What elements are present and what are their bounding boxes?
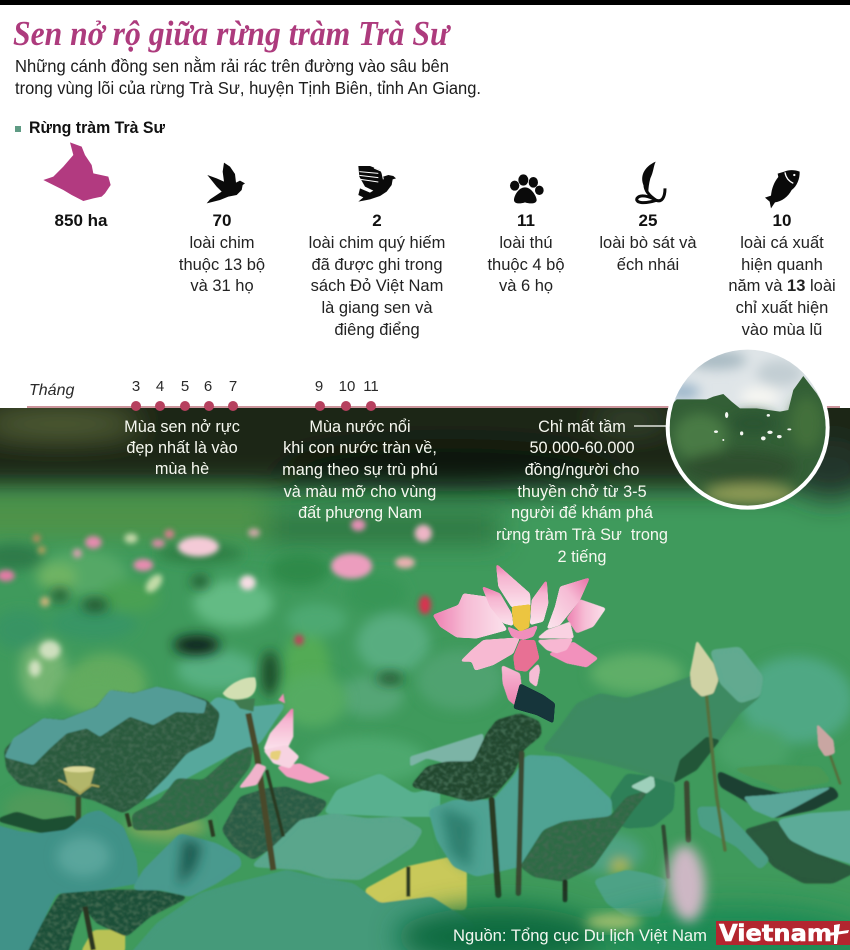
stat: rare birds 2: 2 [372, 211, 382, 230]
month labels: 4 [156, 378, 164, 395]
dark forest band [0, 340, 850, 500]
leaf: dark under bottom left [22, 890, 190, 950]
month labels: 11 [363, 378, 379, 395]
note: flood season [282, 418, 438, 522]
note: lotus season: Mùa sen nở rực [124, 418, 240, 436]
stat: rare birds 2: là giang sen và [322, 299, 433, 317]
month labels: 6 [204, 378, 212, 395]
leaf: large mottled, left [4, 687, 220, 813]
leaf: teal main, centre [250, 813, 423, 880]
blurred bud, foreground [666, 844, 708, 923]
note: lotus season [124, 418, 240, 478]
icon: fish [765, 170, 800, 208]
stat: birds 70: và 31 họ [190, 277, 254, 295]
icon: cobra [637, 162, 665, 203]
callout leader line [634, 425, 668, 427]
icon: paw print [510, 174, 544, 203]
seed pod: centre [223, 677, 256, 712]
timeline axis [27, 406, 840, 408]
blurred field of leaves [0, 497, 500, 717]
note: flood season: mang theo sự trù phú [282, 461, 438, 479]
stat: birds 70: loài chim [189, 234, 255, 252]
leaf: centre-right green [610, 773, 675, 828]
leaf: teal bottom left [0, 810, 138, 950]
stat: mammals 11: loài thú [499, 234, 553, 252]
icon: map of forest [43, 142, 111, 201]
dark gaps between leaves [52, 576, 403, 697]
dark leaf behind flower stem [513, 683, 555, 723]
note: flood season: và màu mỡ cho vùng [284, 483, 436, 501]
source: Nguồn: Tổng cục Du lịch Việt Nam [453, 927, 707, 945]
note: boat tour price: Chỉ mất tầm [538, 418, 626, 436]
title: Sen nở rộ giữa rừng tràm Trà Sư [13, 14, 452, 53]
distant pink lotuses and buds [0, 519, 432, 677]
note: boat tour price: 2 tiếng [558, 548, 606, 566]
leaf: right-hand dark fold [717, 770, 840, 818]
blurred foreground foliage [397, 905, 850, 950]
stat: mammals 11 [487, 174, 565, 295]
leaf: bottom big [125, 870, 473, 950]
month labels: 10 [339, 378, 355, 395]
stat: mammals 11: 11 [517, 211, 535, 230]
month labels [132, 378, 379, 395]
note: flood season: Mùa nước nổi [309, 418, 411, 436]
stat: reptiles and amphibians 25: loài bò sát và [599, 234, 697, 252]
stat: fish 10: loài cá xuất [740, 234, 824, 252]
intro text [15, 55, 481, 98]
leaf: large green, upper right [542, 647, 763, 783]
note: boat tour price: đồng/người cho [525, 461, 639, 479]
photo: lotus field [0, 340, 850, 950]
leaf: behind dark mottled [222, 787, 328, 860]
note: boat tour price [496, 418, 668, 566]
leaf: low teal [593, 870, 667, 917]
leaf: right-hand teal [777, 810, 850, 867]
note: boat tour price: người để khám phá [511, 504, 654, 522]
blurred background, right lower area [417, 650, 850, 874]
top black bar [0, 0, 850, 5]
stat: rare birds 2: loài chim quý hiếm [309, 234, 445, 252]
leaf: second, teal and green [140, 697, 287, 803]
stems, left [85, 713, 408, 950]
foreground leaves, left side [0, 673, 473, 950]
month timeline [27, 378, 840, 411]
stat: reptiles and amphibians 25: ếch nhái [617, 256, 679, 274]
stat: fish 10: 10 [773, 211, 791, 230]
month labels: 3 [132, 378, 140, 395]
note: boat tour price: 50.000-60.000 [529, 439, 635, 457]
leaf: teal centre [132, 833, 242, 897]
stat: mammals 11: và 6 họ [499, 277, 553, 295]
month timeline: Tháng [29, 382, 74, 399]
stat: mammals 11: thuộc 4 bộ [487, 256, 565, 274]
patch: yellow-green water gaps [363, 853, 467, 910]
intro text: trong vùng lõi của rừng Trà Sư, huyện Tịnh Biên, tỉnh An Giang. [15, 78, 481, 98]
stat: area 850 ha [43, 142, 111, 230]
leaf: right-hand lower dark [743, 820, 850, 883]
month labels: 7 [229, 378, 237, 395]
leaf: big teal [428, 755, 612, 877]
stat: area 850 ha: 850 ha [55, 211, 108, 230]
stat: birds 70 [179, 163, 265, 295]
note: boat tour price: rừng tràm Trà Sư trong [496, 526, 668, 544]
stat: rare birds 2: sách Đỏ Việt Nam [311, 277, 443, 295]
stat: reptiles and amphibians 25 [599, 162, 697, 274]
note: lotus season: đẹp nhất là vào [126, 439, 238, 457]
leaf: dark mottled left [410, 713, 542, 802]
stat: fish 10: chỉ xuất hiện [736, 299, 828, 317]
stat: reptiles and amphibians 25: 25 [639, 211, 657, 230]
icon: dove [358, 166, 396, 202]
blurred yellow-green leaf [585, 914, 642, 929]
foreground leaves, right side [397, 640, 850, 950]
note: lotus season: mùa hè [155, 460, 209, 478]
leaf: dark strip left [0, 812, 77, 837]
intro text: Những cánh đồng sen nằm rải rác trên đường vào sâu bên [15, 55, 449, 76]
note: flood season: đất phương Nam [298, 504, 422, 522]
note: flood season: khi con nước tràn về, [283, 439, 437, 457]
stat: fish 10: năm và 13 loài [728, 277, 836, 295]
lotus: small left [238, 693, 332, 788]
stat: fish 10: vào mùa lũ [742, 321, 822, 339]
logo: Vietnam+: Vietnam [719, 921, 832, 947]
stem: seed pod left [70, 797, 86, 840]
stems [492, 697, 840, 900]
stat: fish 10 [728, 170, 836, 339]
leaf: behind, right teal [323, 773, 440, 817]
stat: rare birds 2 [309, 166, 445, 339]
stat: rare birds 2: điêng điểng [334, 321, 420, 339]
month labels: 5 [181, 378, 189, 395]
bud: small right [817, 723, 835, 757]
stat: birds 70: thuộc 13 bộ [179, 256, 265, 274]
leaf: big teal underside [520, 790, 650, 882]
stat: rare birds 2: đã được ghi trong [311, 256, 443, 274]
seed pod: left [58, 766, 99, 795]
stat: fish 10: hiện quanh [741, 256, 823, 274]
icon: bird [207, 163, 245, 203]
leaf: lower middle teal [697, 807, 770, 870]
section heading: Rừng tràm Trà Sư: Rừng tràm Trà Sư [29, 119, 165, 137]
circular photo: melaleuca forest [666, 346, 830, 510]
lotus: main flower [433, 563, 606, 707]
month labels: 9 [315, 378, 323, 395]
month dots [131, 401, 376, 411]
note: boat tour price: thuyền chở từ 3-5 [517, 483, 647, 501]
bud: upper [690, 640, 718, 697]
stat: birds 70: 70 [213, 211, 231, 230]
